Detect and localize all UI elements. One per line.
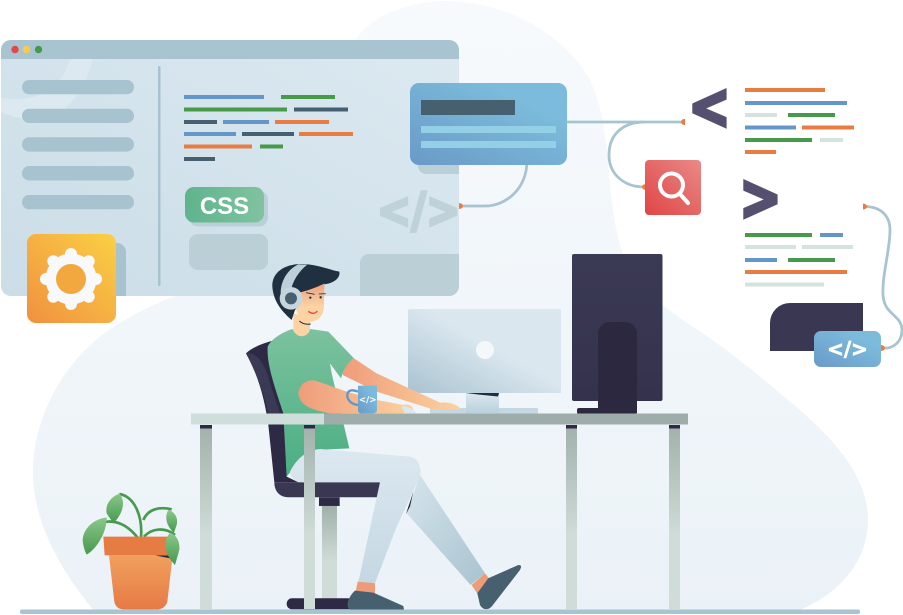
CSS button — [185, 187, 268, 226]
sidebar menu — [22, 80, 134, 209]
icon: settings gear card — [27, 234, 116, 323]
faint code symbol: </> — [377, 183, 460, 239]
monitor: dark rear screen — [572, 254, 662, 414]
far arm — [343, 358, 461, 409]
torso in green shirt — [268, 329, 354, 477]
icon: closing bracket: > — [740, 163, 781, 234]
icon: search card — [645, 160, 701, 215]
desk — [191, 414, 688, 609]
legs in light trousers — [290, 449, 485, 585]
person working at desk — [246, 264, 521, 610]
coffee mug — [298, 380, 417, 413]
icon: opening bracket: < — [688, 72, 730, 143]
CSS button: CSS — [200, 193, 249, 220]
code lines — [184, 95, 353, 161]
chair back and seat — [246, 341, 381, 609]
code lines: upper block — [745, 88, 854, 154]
floor line — [20, 610, 860, 614]
plant in orange pot — [83, 493, 179, 609]
panel: dark card with code badge — [770, 303, 881, 367]
panel: browser window — [1, 40, 460, 296]
connector: blue card to search and brackets — [461, 122, 902, 348]
panel: dark card with code badge: </> — [827, 337, 868, 361]
neck and head — [272, 264, 339, 336]
code lines: lower block — [745, 233, 853, 286]
connector end points — [459, 119, 885, 351]
monitor: silver front screen — [408, 309, 561, 414]
panel: blue code card — [410, 83, 567, 174]
coffee mug: </> — [359, 396, 376, 406]
shoes — [348, 565, 521, 610]
